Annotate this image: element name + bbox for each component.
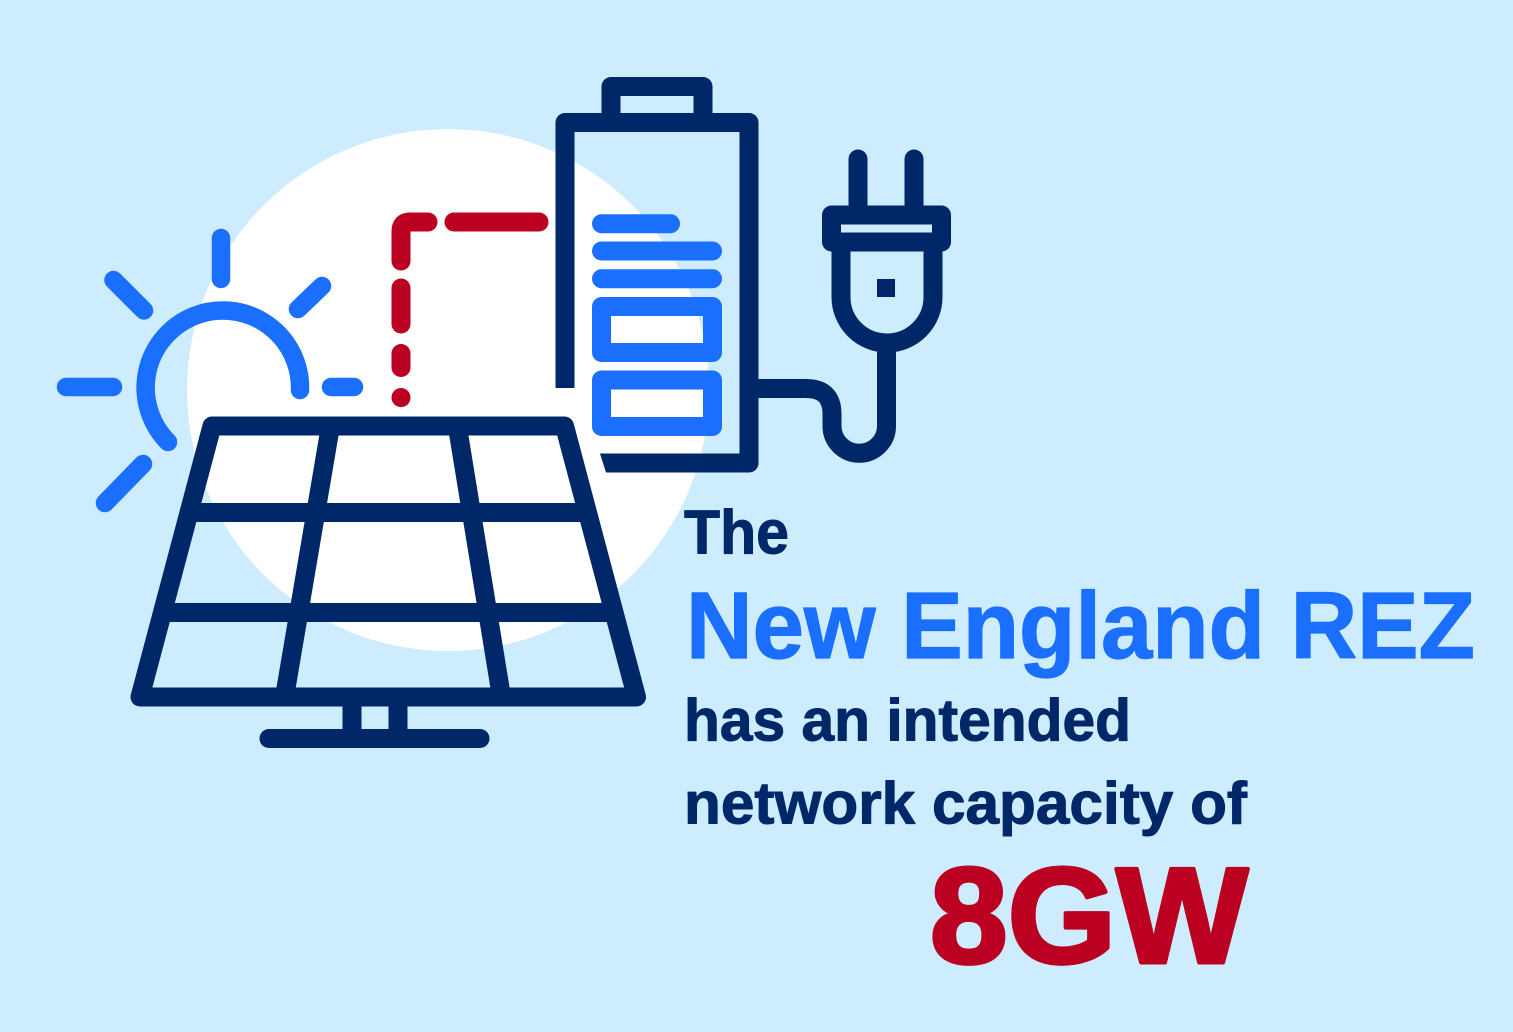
text: network capacity of: network capacity of [684,770,1247,836]
icon: sun [66,238,354,503]
icon: battery [565,86,749,472]
icon: solar panel [140,426,636,738]
white background circle [187,129,709,651]
callout: 8GW: 8GW [930,840,1249,992]
icon: battery charge bars [602,224,712,426]
text: The: The [684,498,789,568]
icon: plug and cable [750,159,942,453]
text: has an intended: has an intended [684,688,1131,754]
heading: New England REZ: New England REZ [686,573,1475,679]
icon: dashed power line [401,222,539,398]
